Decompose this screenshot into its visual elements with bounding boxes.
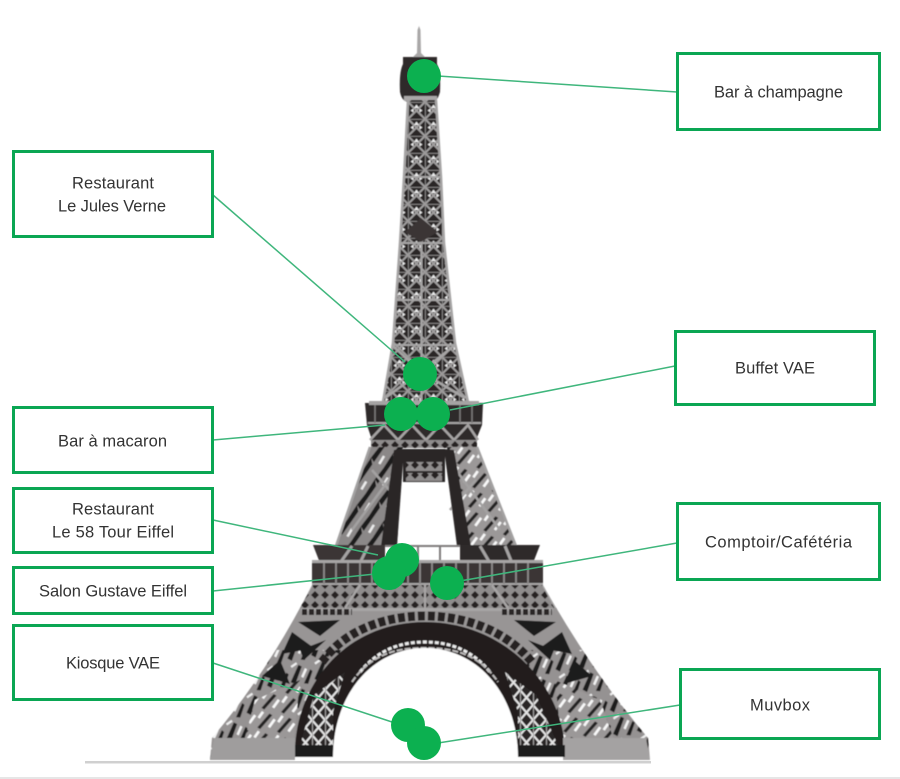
arch lace [360,642,490,672]
label: Buffet VAE [676,332,874,404]
label: Comptoir/Cafétéria: Comptoir/Cafétéria [705,534,853,552]
cell row [302,609,552,615]
upper shaft [383,100,468,402]
label: Restaurant Le 58 Tour Eiffel [14,488,212,552]
label: Restaurant Le 58 Tour Eiffel: Restaurant [72,500,154,518]
label: Restaurant Le Jules Verne: Restaurant [72,174,154,192]
label: Kiosque VAE: Kiosque VAE [66,654,160,672]
label: Muvbox: Muvbox [750,696,811,714]
arch ring [295,622,565,757]
label: Restaurant Le Jules Verne: Le Jules Verne [58,198,166,216]
label: Kiosque VAE [14,626,212,700]
label: Comptoir/Cafétéria [678,504,880,580]
label: Muvbox [680,670,880,738]
label: Bar à macaron: Bar à macaron [58,432,167,450]
ground line [85,761,651,764]
location markers [372,59,464,760]
label: Salon Gustave Eiffel: Salon Gustave Eiffel [39,582,187,600]
Eiffel Tower illustration [205,26,655,762]
leg triangles [262,620,340,684]
label: Salon Gustave Eiffel [14,568,212,614]
spire [413,26,425,57]
lower legs and arch [205,585,655,762]
connector lines [213,76,680,743]
label: Bar à champagne: Bar à champagne [714,84,843,102]
second platform [365,401,483,448]
feet [210,738,295,760]
label: Bar à champagne [678,54,880,130]
middle legs [336,447,516,546]
arch opening [333,648,518,757]
top cabin [400,57,440,102]
label: Restaurant Le Jules Verne [14,152,212,236]
label: Buffet VAE: Buffet VAE [735,360,815,378]
label: Restaurant Le 58 Tour Eiffel: Le 58 Tour Eiffel [52,524,174,542]
label: Bar à macaron [14,408,212,472]
first platform [312,545,543,586]
